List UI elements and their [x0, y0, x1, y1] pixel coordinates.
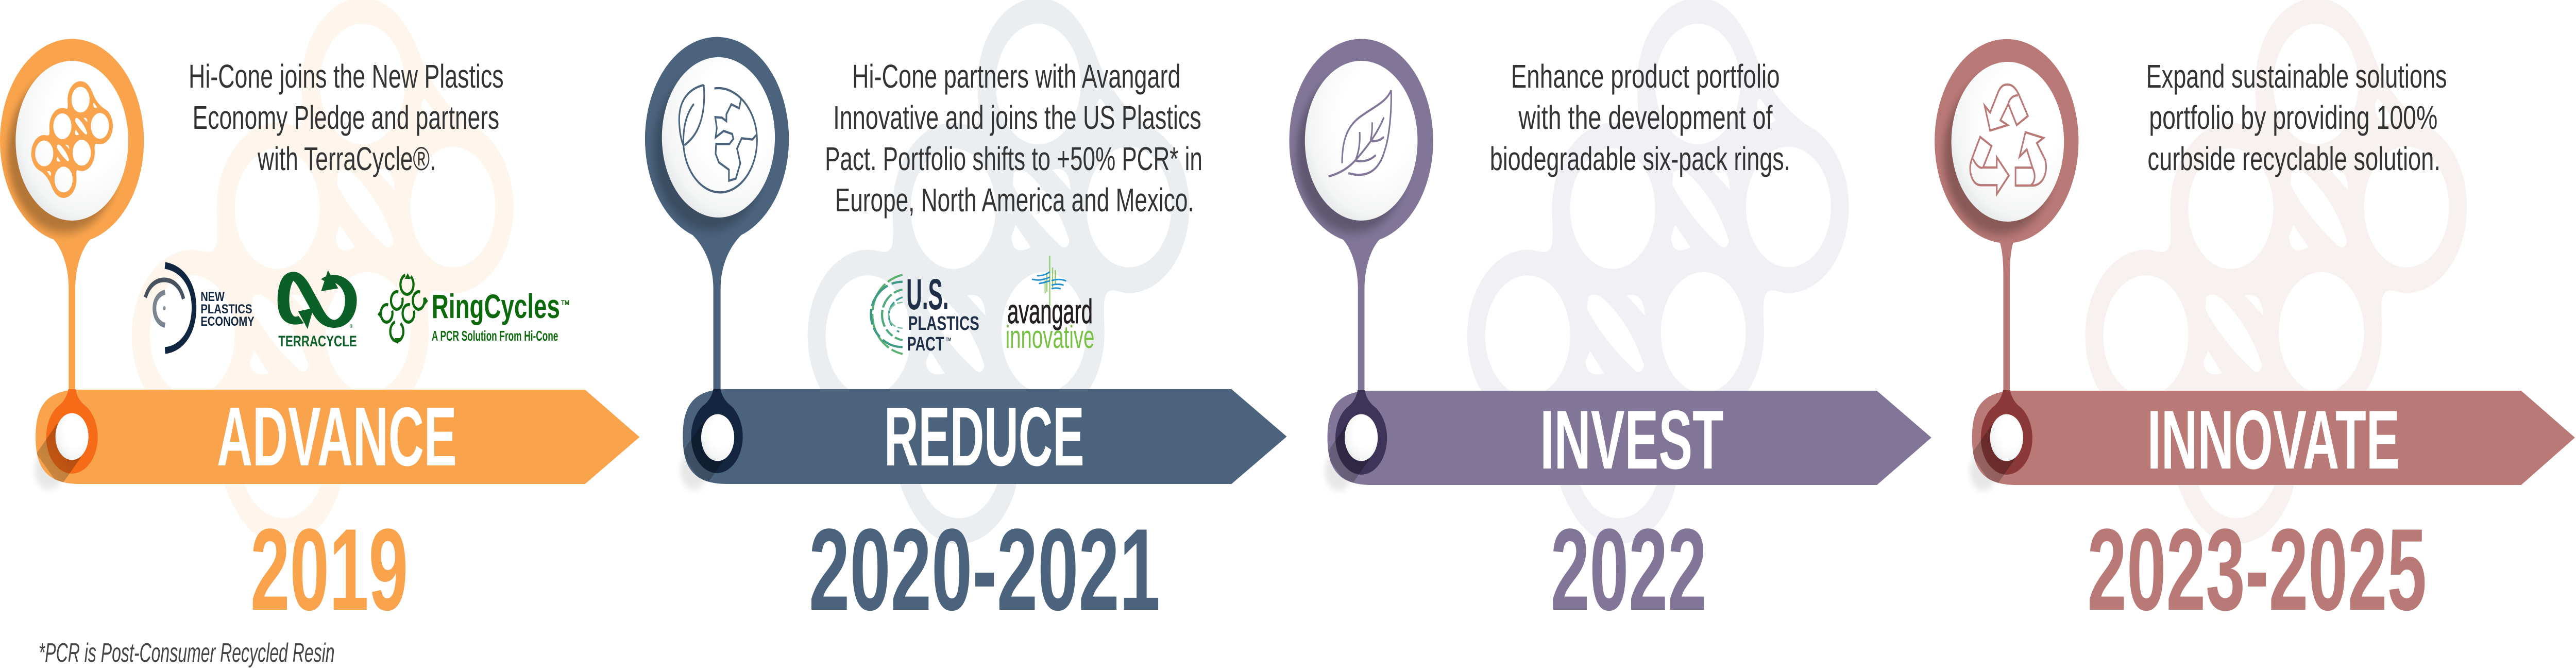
pin marker: [1289, 39, 1433, 393]
arrow banner: [683, 389, 1287, 484]
description text: with TerraCycle®.: [257, 140, 436, 177]
logo: Avangard Innovative: [1006, 256, 1094, 355]
year: 2022: [1551, 505, 1707, 635]
logo: TerraCycle: TERRACYCLE: [278, 333, 357, 350]
arrow banner: [1972, 391, 2575, 485]
description text: Europe, North America and Mexico.: [835, 181, 1194, 219]
timeline node: [1971, 390, 2032, 488]
pin marker: [0, 39, 144, 393]
description text: portfolio by providing 100%: [2149, 99, 2437, 136]
description text: with the development of: [1518, 99, 1773, 136]
watermark: rings: [2086, 0, 2467, 544]
icon: six-pack rings: [31, 81, 113, 198]
timeline node: [37, 389, 98, 487]
banner title: ADVANCE: [217, 390, 457, 483]
year: 2023-2025: [2087, 505, 2427, 635]
footnote: *PCR is Post-Consumer Recycled Resin: [39, 638, 335, 668]
year: 2019: [250, 505, 408, 635]
bar shadow blob: [680, 450, 708, 490]
description text: [189, 58, 504, 177]
description text: [825, 58, 1202, 219]
logo: New Plastics Economy: PLASTICS: [200, 302, 252, 316]
banner title: REDUCE: [884, 390, 1084, 483]
logo: New Plastics Economy: [145, 265, 255, 350]
description text: Economy Pledge and partners: [193, 99, 499, 136]
logo: TerraCycle: ®: [350, 323, 353, 329]
description text: Expand sustainable solutions: [2146, 58, 2447, 95]
icon: leaf: [1329, 90, 1391, 176]
logo: Avangard Innovative: avangard: [1007, 293, 1093, 331]
logo: TerraCycle: [278, 270, 357, 350]
logo: New Plastics Economy: ECONOMY: [200, 314, 255, 329]
arrow banner: [36, 390, 639, 484]
logo: RingCycles: TM: [561, 298, 569, 307]
logo: US Plastics Pact: [871, 271, 979, 355]
logo: RingCycles: A PCR Solution From Hi-Cone: [432, 328, 558, 344]
description text: biodegradable six-pack rings.: [1490, 140, 1790, 177]
icon: globe and leaf: [679, 85, 757, 192]
description text: [2146, 58, 2447, 177]
icon: recycle arrows: [1970, 85, 2046, 194]
watermark: rings: [808, 0, 1190, 544]
year: 2020-2021: [809, 505, 1160, 635]
bar shadow blob: [1970, 452, 1997, 491]
timeline node: [1326, 390, 1387, 488]
description text: Enhance product portfolio: [1511, 58, 1780, 95]
logo: Avangard Innovative: innovative: [1006, 320, 1094, 355]
pin marker: [645, 37, 789, 392]
description text: Innovative and joins the US Plastics: [833, 99, 1201, 136]
banner title: INVEST: [1540, 393, 1723, 487]
watermark: rings: [1467, 0, 1849, 544]
logo: RingCycles: [378, 273, 569, 344]
logo: US Plastics Pact: U.S.: [906, 271, 949, 319]
description text: Hi-Cone joins the New Plastics: [189, 58, 504, 95]
panel: reduce 2020-2021: [645, 0, 1287, 635]
pin marker: [1935, 39, 2078, 394]
panel: innovate 2023-2025: [1935, 0, 2575, 635]
description text: Hi-Cone partners with Avangard: [852, 58, 1181, 95]
logo: RingCycles: RingCycles: [432, 288, 560, 326]
arrow banner: [1328, 391, 1931, 485]
logo: New Plastics Economy: NEW: [200, 289, 225, 304]
bar shadow blob: [35, 450, 63, 490]
description text: Pact. Portfolio shifts to +50% PCR* in: [825, 140, 1202, 177]
bar shadow blob: [1325, 452, 1352, 491]
logo: US Plastics Pact: TM: [946, 337, 951, 342]
description text: curbside recyclable solution.: [2147, 140, 2441, 177]
timeline node: [681, 389, 743, 487]
logo: US Plastics Pact: PLASTICS: [908, 312, 979, 334]
description text: [1490, 58, 1790, 177]
panel: advance 2019: [0, 0, 639, 668]
logo: US Plastics Pact: PACT: [907, 332, 944, 355]
banner title: INNOVATE: [2147, 393, 2400, 487]
watermark: rings: [132, 0, 514, 544]
panel: invest 2022: [1289, 0, 1931, 635]
